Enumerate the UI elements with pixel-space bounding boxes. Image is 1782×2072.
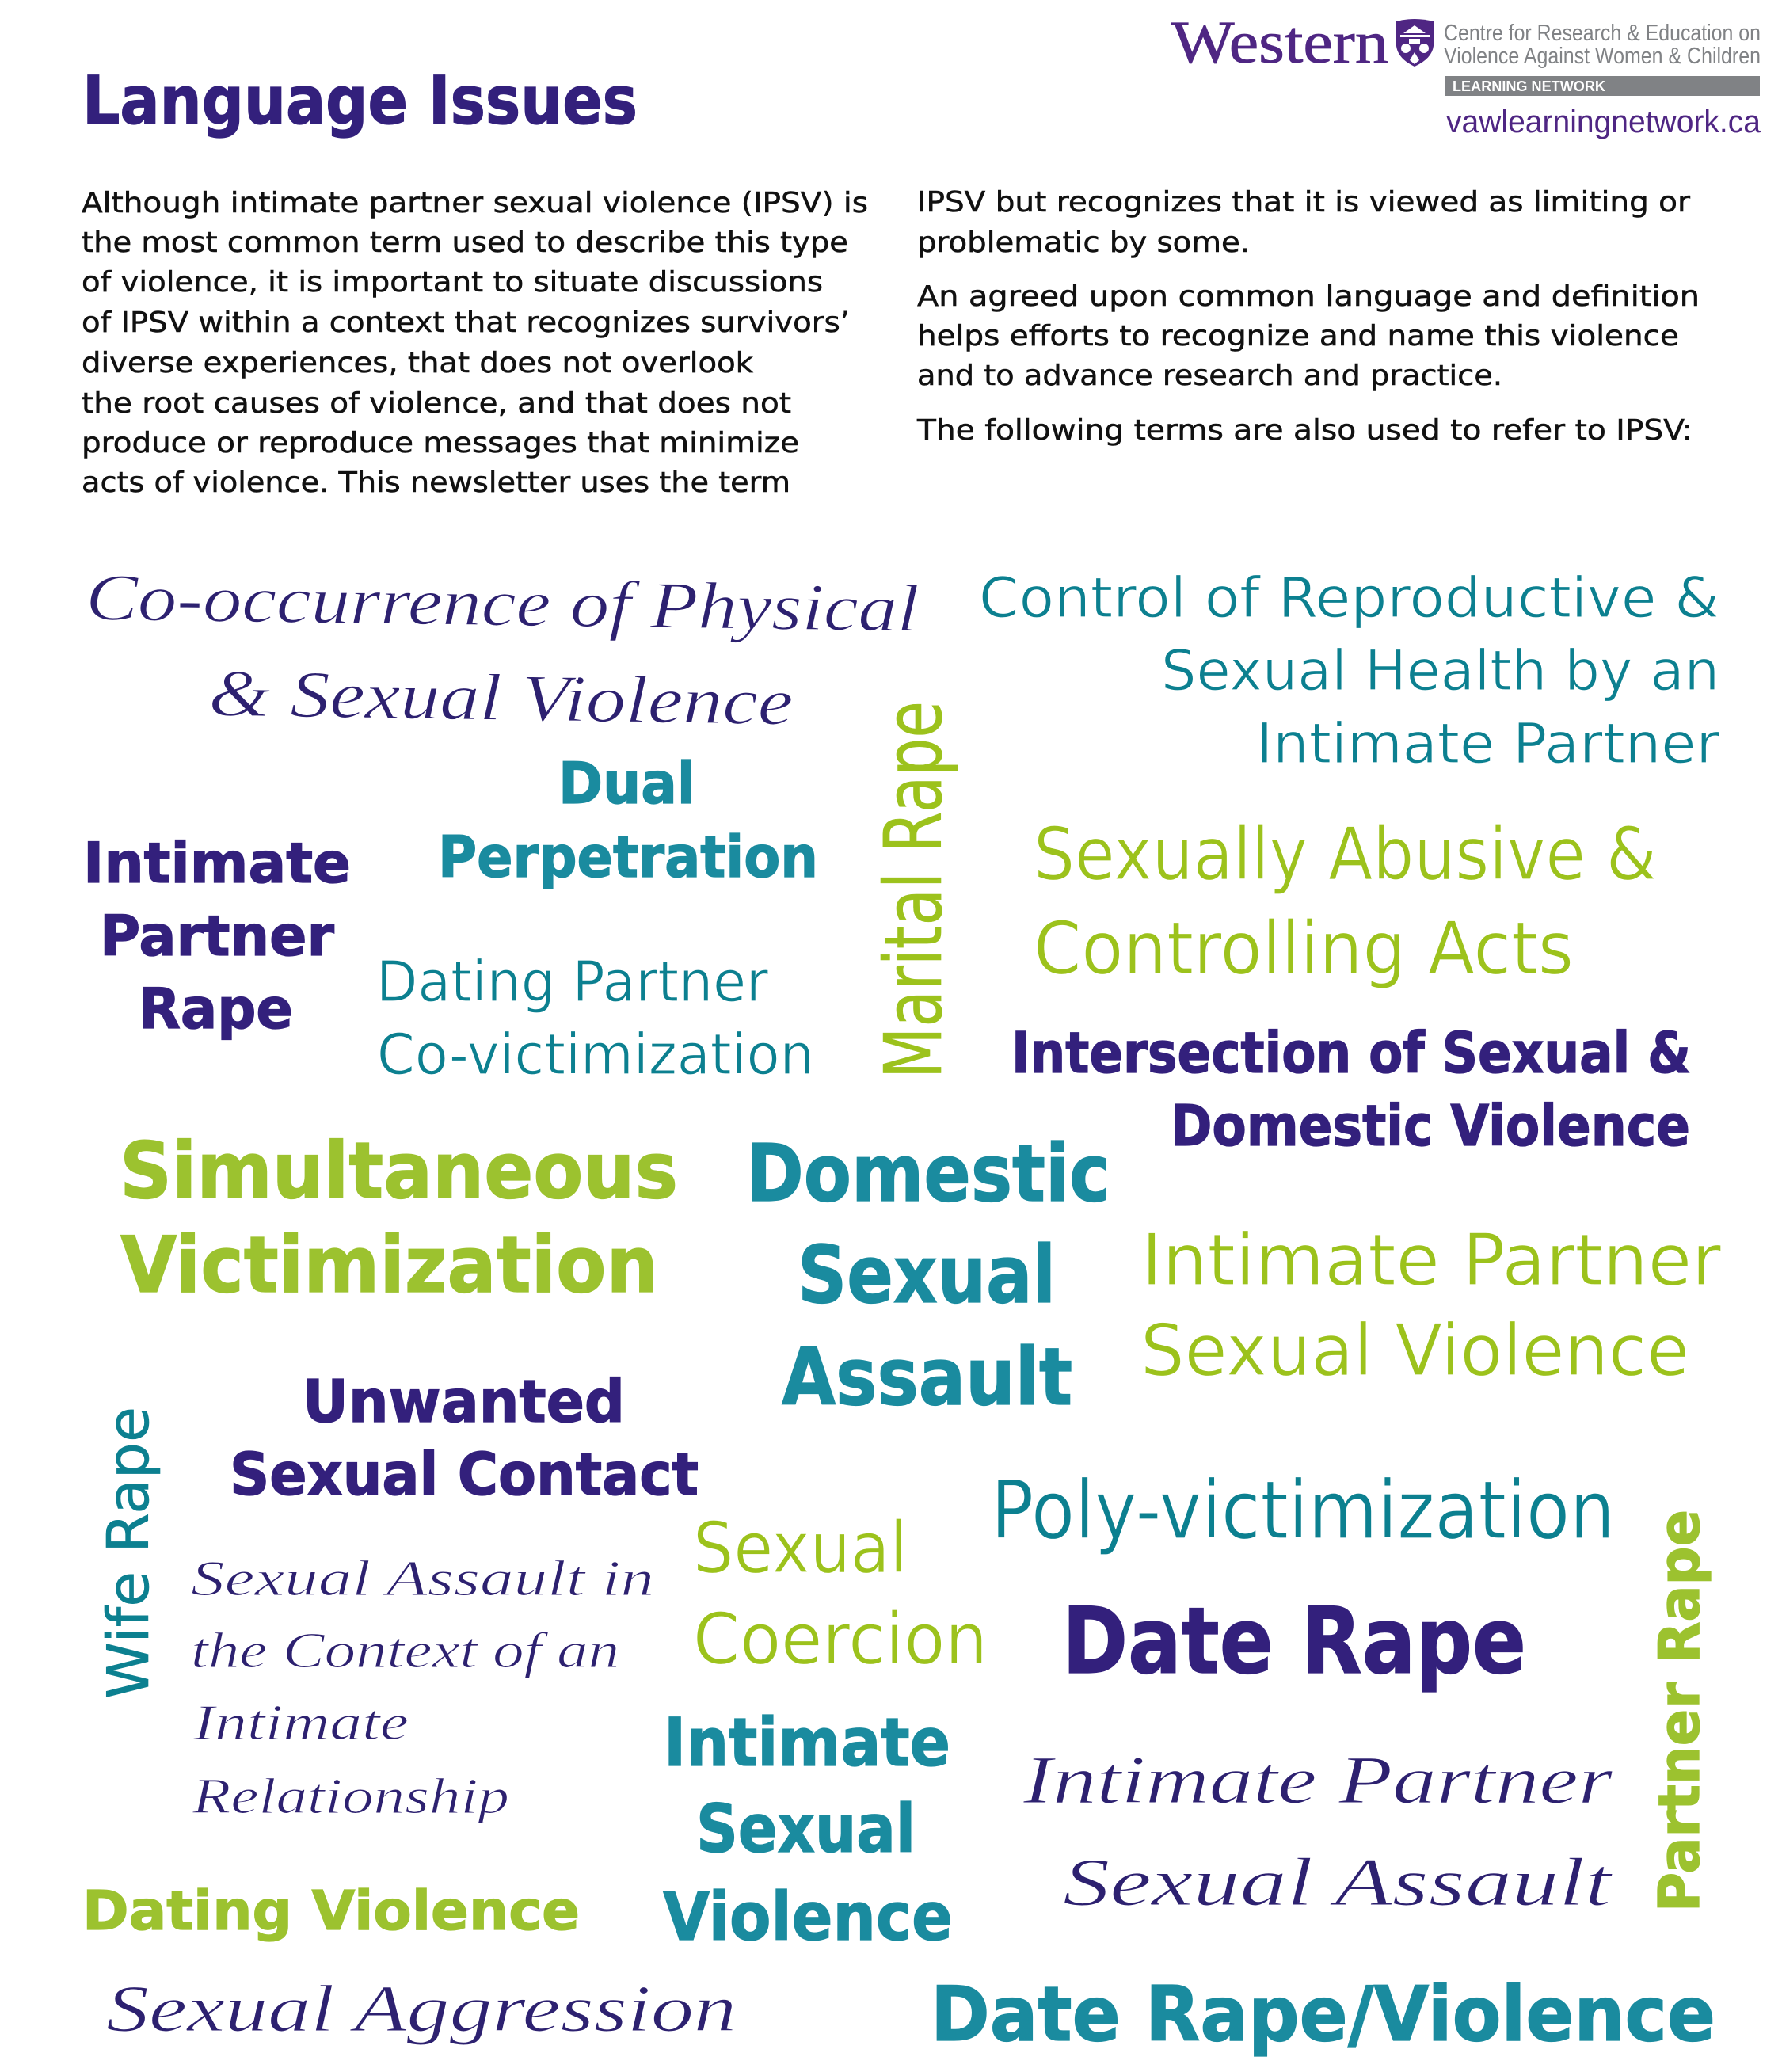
term: Control of Reproductive & Sexual Health by an Intimate Partner: Intimate Partner	[1256, 711, 1719, 776]
term: Intimate Partner Sexual Violence: Intimate Partner	[1141, 1219, 1721, 1302]
text block: right column	[916, 186, 1700, 447]
term: Dating Violence: Dating Violence	[82, 1880, 580, 1943]
text block: left column: acts of violence. This newsletter uses the term	[82, 467, 790, 499]
term: Unwanted Sexual Contact: Sexual Contact	[230, 1441, 699, 1509]
text block: left column: the root causes of violence, and that does not	[82, 387, 791, 420]
term: Dating Partner Co-victimization: Dating Partner	[376, 949, 769, 1015]
term: Intimate Sexual Violence: Sexual	[696, 1790, 916, 1868]
term: Domestic Sexual Assault: Sexual	[798, 1228, 1056, 1321]
term: Domestic Sexual Assault	[746, 1127, 1110, 1423]
term: Marital Rape (vertical): Marital Rape	[867, 701, 960, 1079]
term: Intimate Sexual Violence: Intimate	[664, 1704, 950, 1781]
term: Co-occurrence of Physical & Sexual Violence	[86, 561, 920, 740]
term: Sexual Assault in the Context of an Intimate Relationship: Relationship	[192, 1768, 509, 1824]
term: Control of Reproductive & Sexual Health by an Intimate Partner: Control of Reproductive &	[979, 566, 1719, 630]
term: Simultaneous Victimization: Simultaneous	[120, 1126, 678, 1217]
term: Sexually Abusive & Controlling Acts: Sexually Abusive &	[1034, 812, 1657, 897]
term: Date Rape: Date Rape	[1062, 1588, 1526, 1695]
text block: left column: of violence, it is important to situate discussions	[82, 266, 823, 299]
term: Dating Partner Co-victimization	[376, 949, 814, 1087]
term: Intersection of Sexual & Domestic Violence: Domestic Violence	[1171, 1093, 1690, 1159]
term: Control of Reproductive & Sexual Health by an Intimate Partner	[979, 566, 1719, 776]
term: Dating Partner Co-victimization: Co-victimization	[377, 1022, 814, 1087]
term: Poly-victimization: Poly-victimization	[991, 1464, 1615, 1558]
text block: right column: The following terms are also used to refer to IPSV:	[916, 414, 1693, 447]
term: Intimate Partner Rape	[83, 831, 351, 1042]
text block: right column: IPSV but recognizes that it is viewed as limiting or	[917, 186, 1690, 219]
term: Intersection of Sexual & Domestic Violence	[1011, 1020, 1691, 1159]
term: Unwanted Sexual Contact	[230, 1368, 699, 1509]
grey bar: learning network: LEARNING NETWORK	[1453, 78, 1605, 94]
term: Intimate Partner Sexual Assault: Intimate Partner	[1022, 1742, 1613, 1818]
term: Sexual Assault in the Context of an Intimate Relationship: the Context of an	[191, 1622, 619, 1678]
term: Sexual Aggression: Sexual Aggression	[106, 1972, 737, 2046]
term: Intersection of Sexual & Domestic Violence: Intersection of Sexual &	[1011, 1020, 1691, 1086]
logo block: Western Centre for Research & Education	[1171, 10, 1761, 139]
term: Sexual Assault in the Context of an Intimate Relationship: Intimate	[192, 1694, 409, 1750]
text block: right column: helps efforts to recognize and name this violence	[917, 320, 1679, 352]
term: Intimate Sexual Violence	[663, 1704, 953, 1956]
term: Unwanted Sexual Contact: Unwanted	[303, 1368, 625, 1436]
term: Domestic Sexual Assault: Domestic	[746, 1127, 1110, 1220]
text block: right column: and to advance research and practice.	[917, 360, 1502, 392]
text block: left column: the most common term used to describe this type	[82, 227, 848, 259]
text block: left column: produce or reproduce messages that minimize	[82, 427, 799, 459]
term: Sexually Abusive & Controlling Acts	[1034, 812, 1657, 991]
term: Intimate Partner Sexual Violence: Sexual Violence	[1140, 1309, 1689, 1392]
text block: left column: Although intimate partner sexual violence (IPSV) is	[82, 187, 868, 219]
term: Simultaneous Victimization: Victimization	[120, 1221, 658, 1311]
term: Co-occurrence of Physical & Sexual Violence: Co-occurrence of Physical	[86, 561, 920, 646]
term: Intimate Partner Rape: Partner	[100, 904, 334, 969]
term: Dual Perpetration: Dual	[558, 750, 695, 817]
term: Intimate Partner Rape: Intimate	[83, 831, 351, 896]
term: Sexual Assault in the Context of an Intimate Relationship	[191, 1550, 654, 1824]
term: Simultaneous Victimization	[120, 1126, 678, 1311]
title: Language Issues	[82, 62, 638, 139]
term: Intimate Partner Sexual Violence	[1140, 1219, 1721, 1392]
term: Wife Rape (vertical): Wife Rape	[95, 1407, 162, 1699]
term: Sexual Coercion	[693, 1506, 988, 1680]
text block: left column: diverse experiences, that does not overlook	[82, 347, 753, 379]
term: Co-occurrence of Physical & Sexual Violence: & Sexual Violence	[208, 657, 794, 740]
term: Date Rape/Violence: Date Rape/Violence	[931, 1971, 1715, 2059]
grey bar: learning network	[1445, 76, 1760, 96]
term: Intimate Partner Sexual Assault: Sexual Assault	[1063, 1844, 1613, 1920]
text block: right column: problematic by some.	[917, 227, 1250, 259]
term: Intimate Partner Rape: Rape	[139, 977, 293, 1042]
term: Partner Rape (vertical): Partner Rape	[1647, 1510, 1712, 1912]
term: Intimate Partner Sexual Assault	[1022, 1742, 1613, 1920]
term: Domestic Sexual Assault: Assault	[782, 1331, 1072, 1423]
term: Sexually Abusive & Controlling Acts: Controlling Acts	[1034, 906, 1574, 991]
text block: left column	[82, 187, 868, 499]
text block: right column: An agreed upon common language and definition	[917, 280, 1700, 313]
term: Sexual Coercion: Sexual	[693, 1506, 908, 1589]
term: Dual Perpetration	[438, 750, 818, 890]
text block: left column: of IPSV within a context that recognizes survivors’	[82, 307, 850, 339]
website url: vawlearningnetwork.ca	[1446, 105, 1761, 139]
wordmark: Western: Western	[1171, 10, 1388, 76]
term: Dual Perpetration: Perpetration	[438, 824, 818, 890]
term: Intimate Sexual Violence: Violence	[663, 1878, 953, 1956]
term: Control of Reproductive & Sexual Health by an Intimate Partner: Sexual Health by an	[1161, 638, 1719, 703]
icon: university shield	[1396, 19, 1434, 67]
term: Sexual Assault in the Context of an Intimate Relationship: Sexual Assault in	[191, 1550, 654, 1606]
term: Sexual Coercion: Coercion	[693, 1598, 988, 1680]
